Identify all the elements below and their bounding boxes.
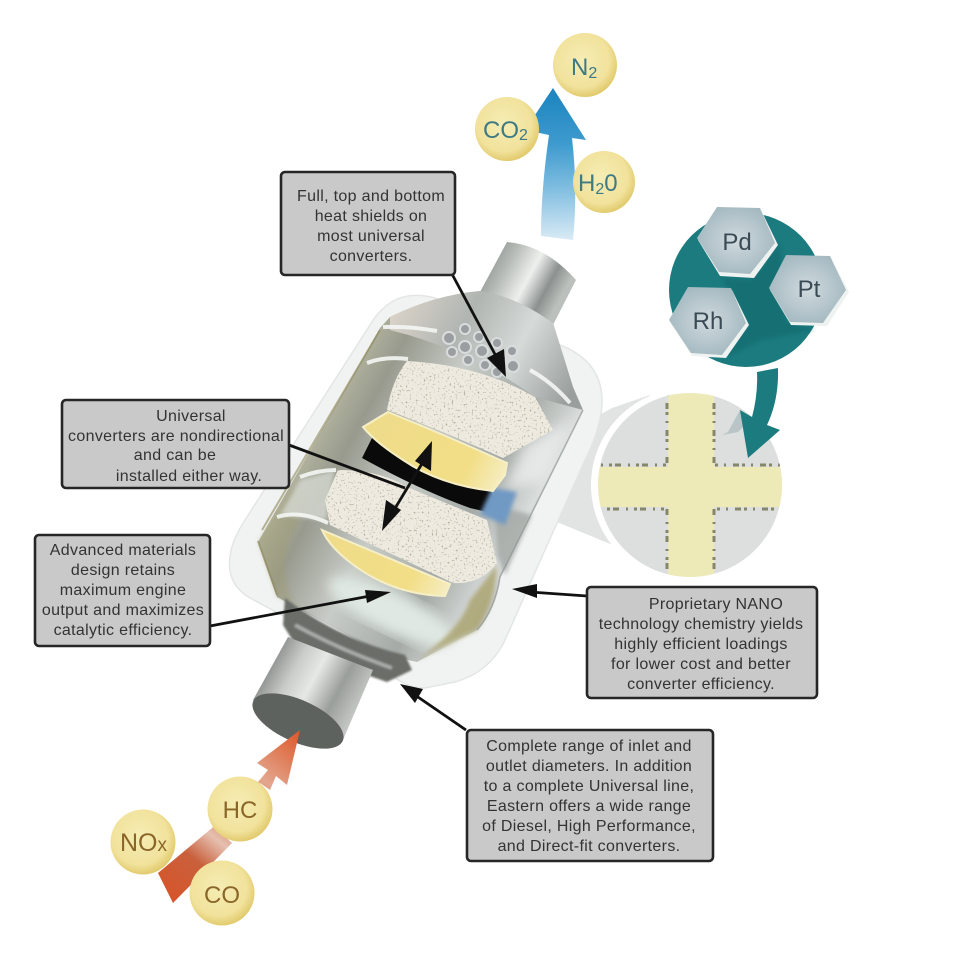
hexagon: Rh: Rh <box>693 308 723 335</box>
hexagon: Pt: Pt <box>798 276 821 303</box>
lower inlet pipe <box>253 637 373 740</box>
silver band left of lower catalyst <box>280 470 335 520</box>
callout: advanced materials: Advanced materials <box>50 542 196 559</box>
inlet opening <box>245 682 351 760</box>
callout: nondirectional: Universal <box>156 408 226 425</box>
molecule: H2O: H <box>578 170 595 197</box>
upper catalyst yellow face <box>363 412 507 491</box>
callout: nano technology: technology chemistry yields <box>599 616 803 633</box>
callout: nondirectional: installed either way. <box>116 468 262 485</box>
callout: nano technology: Proprietary NANO <box>649 596 783 613</box>
callout: inlet outlet range: Complete range of inlet and <box>486 738 692 755</box>
precious metals teal disc <box>669 207 849 367</box>
molecule: CO2: CO <box>483 117 519 144</box>
callout: inlet outlet range: Eastern offers a wide range <box>487 798 691 815</box>
molecule: NOx <box>110 810 176 874</box>
callout: heat shields: Full, top and bottom <box>297 188 445 205</box>
translucent heat shield outline <box>229 295 602 688</box>
molecule: H2O <box>573 151 635 213</box>
callout: nano technology: for lower cost and better <box>611 656 791 673</box>
molecule: N2 <box>553 33 617 97</box>
molecule: N2: N <box>571 54 588 81</box>
callout arrow: inlet outlet <box>400 684 466 730</box>
callout: inlet outlet range: of Diesel, High Performance, <box>482 818 696 835</box>
top outlet pipe <box>480 242 576 325</box>
callout: inlet outlet range: and Direct-fit converters. <box>498 838 680 855</box>
molecule: CO <box>190 860 254 926</box>
callout: nondirectional <box>62 400 289 488</box>
molecule: H2O: 0 <box>604 170 618 197</box>
olive lower right edge <box>417 565 497 660</box>
icon: blue outflow arrow <box>525 88 586 240</box>
catalytic converter <box>245 242 583 760</box>
callout: advanced materials <box>35 535 210 646</box>
callout: nondirectional: converters are nondirectional <box>68 428 284 445</box>
callout: nano technology: converter efficiency. <box>627 676 775 693</box>
olive left edge <box>258 490 310 606</box>
molecule: CO2 <box>475 97 539 161</box>
pale lower cone highlight <box>320 563 464 661</box>
heat shield dimples <box>443 324 519 377</box>
callout: inlet outlet range <box>467 730 713 861</box>
molecule: H2O: 2 <box>595 181 604 198</box>
callout: inlet outlet range: outlet diameters. In addition <box>486 758 692 775</box>
callout: inlet outlet range: to a complete Universal line, <box>484 778 694 795</box>
molecule: CO: CO <box>204 882 240 909</box>
icon: orange inflow arrow <box>158 730 300 903</box>
molecule: HC <box>208 776 272 842</box>
callout arrow: heat shields <box>452 274 506 377</box>
callout: nano technology <box>587 587 817 698</box>
black gap between catalysts <box>362 438 500 515</box>
icon: teal arrow from metals to detail <box>740 368 780 458</box>
callout: advanced materials: output and maximizes <box>42 602 204 619</box>
callout: advanced materials: design retains <box>71 562 175 579</box>
lower catalyst yellow face <box>322 530 450 596</box>
callout: heat shields: heat shields on <box>315 208 427 225</box>
dome shading <box>390 291 583 410</box>
molecule: NOx: NOx <box>120 829 168 857</box>
silver lower right band <box>495 505 532 575</box>
magnified catalyst detail circle <box>591 388 785 582</box>
callout: advanced materials: catalytic efficiency. <box>54 622 192 639</box>
hexagon: Pd <box>697 207 778 278</box>
callout: heat shields: most universal <box>317 228 425 245</box>
callout: advanced materials: maximum engine <box>60 582 186 599</box>
callout: nano technology: highly efficient loadings <box>614 636 788 653</box>
callout: heat shields: converters. <box>330 248 412 265</box>
hexagon: Pt <box>769 255 849 326</box>
callout: heat shields <box>281 172 455 275</box>
hexagon: Pd: Pd <box>722 229 752 256</box>
lower catalyst block <box>325 470 497 583</box>
callout: nondirectional: and can be <box>134 447 216 464</box>
translucent pale right reflection <box>505 420 572 490</box>
lower inlet pipe collar <box>283 598 412 682</box>
molecule: CO2: 2 <box>519 127 528 144</box>
callout arrow: nondirectional <box>289 441 432 531</box>
hexagon: Rh <box>669 287 749 358</box>
callout arrow: nano <box>512 584 587 598</box>
molecule: N2: 2 <box>588 65 597 82</box>
callout arrow: materials <box>210 590 391 626</box>
rib bands <box>277 327 570 523</box>
metal shell with dome and cone <box>258 291 583 662</box>
upper catalyst block <box>387 361 553 458</box>
molecule: HC: HC <box>223 797 257 824</box>
magnifier cone connecting converter to detail <box>552 395 660 570</box>
